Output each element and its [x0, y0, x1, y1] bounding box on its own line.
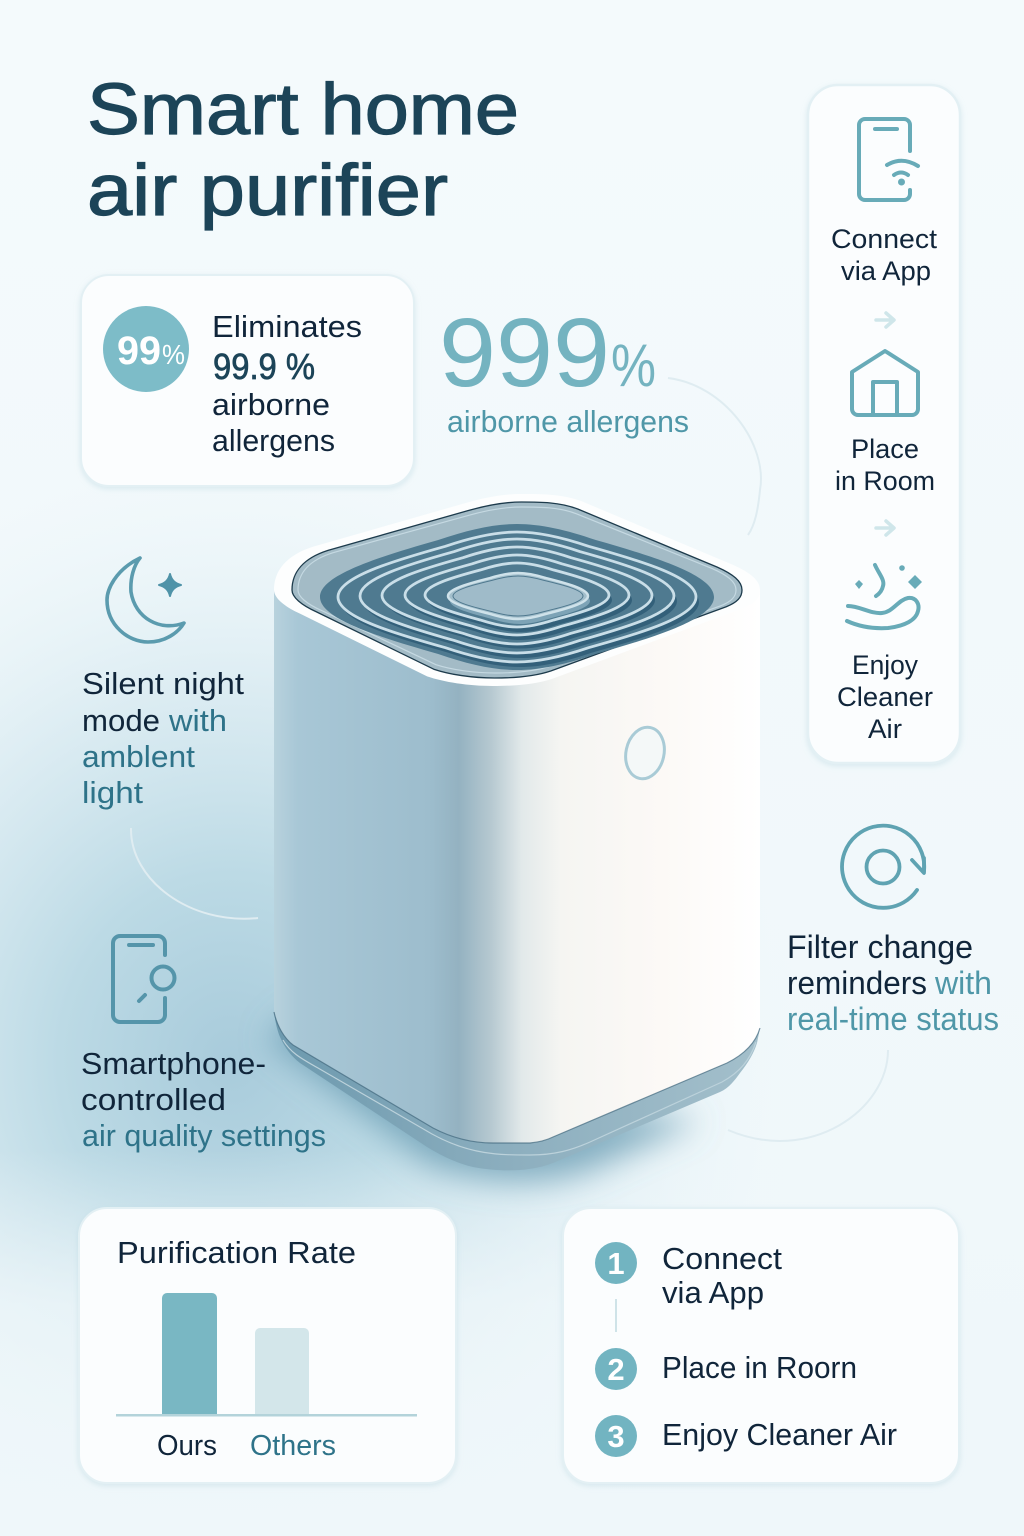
step label: enjoy cleaner air: Cleaner	[837, 682, 933, 712]
title: air purifier	[87, 151, 448, 231]
feature: smartphone control: controlled	[81, 1082, 226, 1117]
bar chart	[116, 1293, 417, 1462]
stat description	[212, 309, 362, 458]
product: air purifier	[268, 494, 760, 1181]
step label: place in room	[835, 434, 935, 496]
icon: phone with wifi	[859, 119, 918, 200]
step 2: Place in Roorn	[662, 1350, 857, 1385]
big stat: 999% airborne allergens: %	[611, 332, 656, 399]
badge: 99%: %	[162, 339, 185, 370]
step label: place in room: in Room	[835, 466, 935, 496]
feature: smartphone control	[81, 936, 326, 1153]
step 3: Enjoy Cleaner Air	[662, 1417, 897, 1452]
step 3	[595, 1415, 897, 1457]
icon: filter refresh	[842, 826, 924, 908]
step 1: Connect	[662, 1241, 782, 1276]
top rim	[274, 494, 760, 686]
title: Smart home	[87, 70, 519, 150]
step label: enjoy cleaner air: Air	[868, 714, 902, 744]
step label: connect via app: Connect	[831, 224, 938, 254]
title	[87, 70, 519, 231]
bar chart: Others	[250, 1430, 336, 1462]
badge: 99%: 99	[117, 329, 161, 373]
control button	[621, 724, 669, 782]
feature: filter change reminders: Filter change	[787, 929, 973, 965]
arrow	[876, 521, 894, 535]
panel: how it works vertical steps	[808, 85, 960, 763]
step 1: 1	[607, 1246, 625, 1281]
arrow	[876, 313, 894, 327]
badge: 99%	[103, 306, 189, 392]
step 1	[595, 1241, 782, 1310]
feature: filter change reminders: with	[934, 965, 992, 1001]
feature: silent night mode	[82, 558, 244, 810]
step 3: 3	[607, 1419, 625, 1454]
big stat: 999% airborne allergens: airborne allergens	[447, 404, 689, 439]
feature: silent night mode: with	[168, 703, 227, 738]
panel: purification rate chart	[79, 1208, 456, 1483]
stat description: allergens	[212, 423, 335, 458]
icon: house	[852, 351, 918, 415]
panel: numbered steps	[563, 1208, 959, 1483]
step label: connect via app	[831, 224, 938, 286]
step 2	[595, 1348, 857, 1390]
body shell	[274, 590, 760, 1143]
big stat: 999% airborne allergens	[439, 298, 689, 439]
step label: enjoy cleaner air: Enjoy	[852, 650, 918, 680]
feature: silent night mode: Silent night	[82, 666, 244, 701]
feature: silent night mode: light	[82, 775, 143, 810]
icon: moon and star	[107, 558, 184, 642]
chart title: Purification Rate	[117, 1235, 356, 1270]
bar chart: Ours	[157, 1430, 217, 1462]
feature: smartphone control: air quality settings	[82, 1118, 326, 1153]
icon: smartphone	[113, 936, 174, 1022]
stat description: airborne	[212, 387, 330, 422]
feature: filter change reminders: real-time status	[787, 1001, 999, 1037]
stat description: 99.9 %	[213, 346, 315, 387]
step 1: via App	[662, 1275, 764, 1310]
panel: 99.9% allergen stat	[81, 275, 414, 486]
icon: clean air	[847, 565, 922, 628]
stat description: Eliminates	[212, 309, 362, 344]
step label: place in room: Place	[851, 434, 919, 464]
floor shadow	[268, 1010, 700, 1181]
feature: filter change reminders: reminders	[787, 965, 927, 1001]
big stat: 999% airborne allergens: 999	[439, 298, 610, 407]
feature: smartphone control: Smartphone-	[81, 1046, 266, 1081]
concentric filter vents	[292, 502, 742, 678]
feature: filter change reminders	[787, 826, 999, 1037]
step label: enjoy cleaner air	[837, 650, 933, 744]
feature: silent night mode: amblent	[82, 739, 195, 774]
step 2: 2	[607, 1352, 625, 1387]
step label: connect via app: via App	[841, 256, 931, 286]
feature: silent night mode: mode	[82, 703, 160, 738]
base plinth	[274, 1012, 760, 1170]
